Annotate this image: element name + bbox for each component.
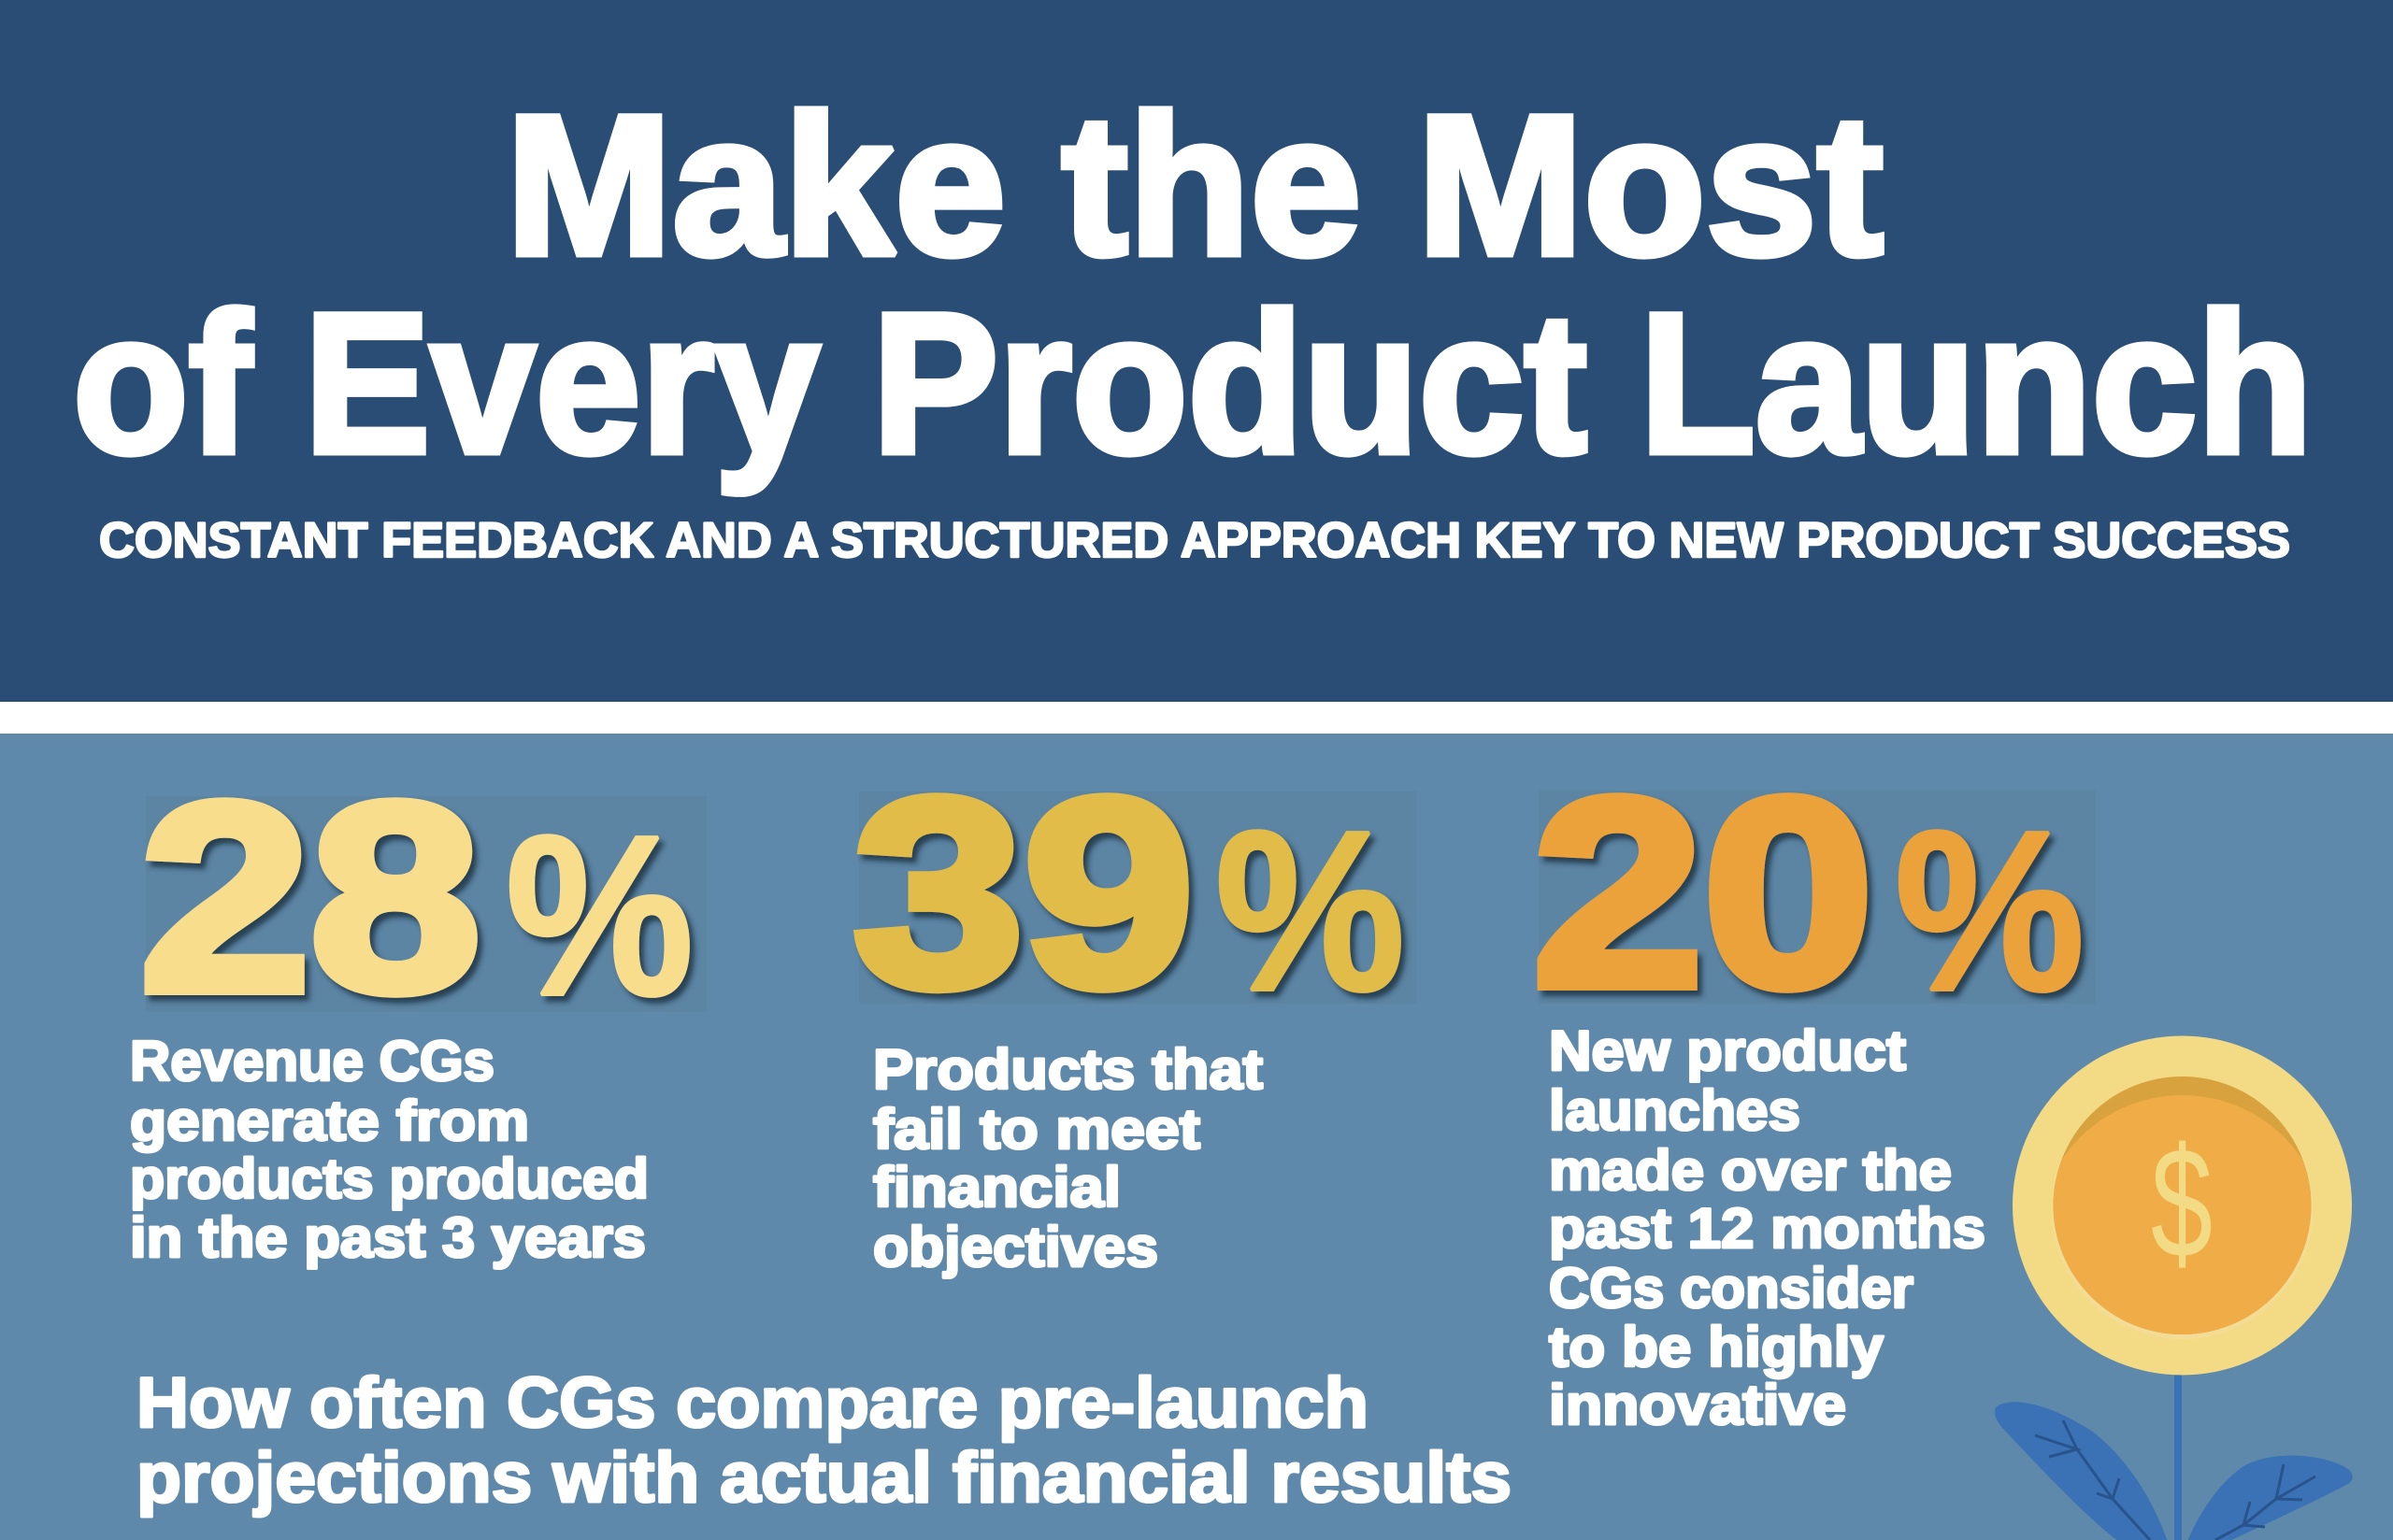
panel: statistics section — [0, 734, 2393, 1540]
text block: innovative launches: innovative — [1549, 1374, 1846, 1436]
heading: projections comparison — [136, 1363, 1512, 1518]
text block: failed products: financial — [873, 1156, 1121, 1219]
stat: 28 percent: 28 — [140, 748, 480, 1047]
stem — [2174, 1369, 2182, 1540]
coin — [2013, 1035, 2352, 1376]
heading: projections comparison: projections with actual financial results — [136, 1438, 1512, 1518]
text block: revenue: generate from — [130, 1090, 529, 1152]
text block: innovative launches: past 12 months — [1549, 1197, 1985, 1260]
title: Make the Most — [506, 74, 1884, 297]
stat: 20 percent — [1533, 743, 2096, 1042]
text block: revenue: Revenue CGs — [130, 1030, 494, 1092]
stat: 28 percent: % — [506, 788, 694, 1043]
left leaf — [1995, 1402, 2168, 1540]
subtitle: CONSTANT FEEDBACK AND A STRUCTURED APPROACH KEY TO NEW PRODUCT SUCCESS — [99, 513, 2290, 568]
text block: failed products — [873, 1038, 1263, 1278]
right leaf — [2187, 1456, 2353, 1540]
text block: revenue: products produced — [130, 1148, 649, 1210]
stat: 20 percent: % — [1895, 783, 2085, 1038]
text block: innovative launches — [1549, 1020, 1985, 1436]
dollar sign: $ — [2151, 1115, 2213, 1290]
stat: 39 percent — [853, 743, 1416, 1042]
text block: failed products: Products that — [873, 1038, 1263, 1101]
title: of Every Product Launch — [73, 272, 2313, 495]
text block: innovative launches: New product — [1549, 1020, 1906, 1082]
stat: 28 percent — [140, 748, 707, 1047]
title — [73, 74, 2313, 495]
stat: 20 percent: 20 — [1533, 743, 1873, 1042]
panel: header band — [0, 0, 2393, 702]
text block: revenue: in the past 3 years — [130, 1206, 646, 1269]
text block: innovative launches: made over the — [1549, 1139, 1952, 1202]
text block: innovative launches: launches — [1549, 1079, 1800, 1142]
stat: 39 percent: % — [1215, 783, 1405, 1038]
text block: revenue — [130, 1030, 649, 1269]
stat: 39 percent: 39 — [853, 743, 1194, 1042]
text block: innovative launches: CGs consider — [1549, 1257, 1913, 1319]
heading: projections comparison: How often CGs compare pre-launch — [136, 1363, 1368, 1443]
text block: failed products: fail to meet — [873, 1098, 1200, 1161]
icon: coin plant — [1995, 1035, 2353, 1540]
text block: innovative launches: to be highly — [1549, 1316, 1884, 1378]
text block: failed products: objectives — [873, 1216, 1158, 1278]
